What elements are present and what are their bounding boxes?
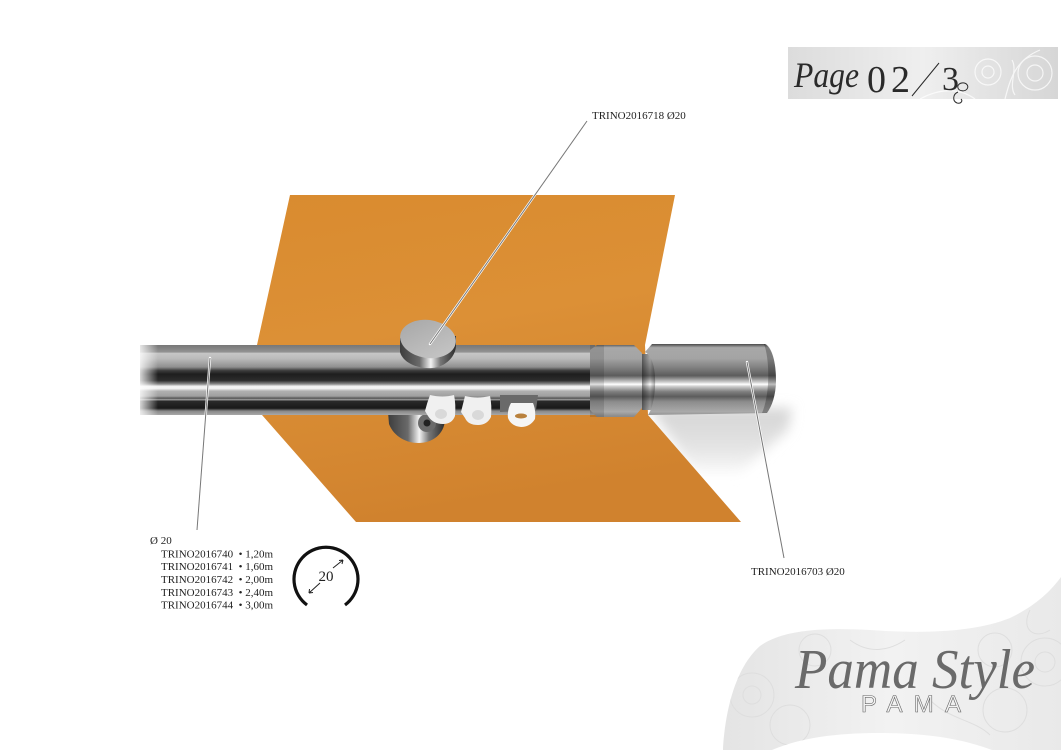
page number text: Page: [793, 55, 859, 95]
label: support part number: TRINO2016718 Ø20: [592, 110, 686, 122]
rod part list: TRINO2016741 • 1,60m: [161, 561, 273, 573]
rod tube: [140, 345, 595, 415]
collar: [590, 345, 642, 417]
diameter icon: 20: [318, 569, 334, 585]
page number banner: [788, 47, 1058, 103]
brand name: Pama Style: [794, 639, 1035, 701]
rod part list: Ø 20: [150, 535, 172, 547]
diameter icon: [294, 547, 358, 605]
left fade: [136, 343, 158, 418]
leader line: end cap: [747, 362, 784, 558]
page number text: 02: [867, 59, 910, 101]
page number text: [793, 55, 968, 103]
round support disc: [398, 316, 458, 368]
orange wall panel: [257, 195, 741, 522]
rod part list: TRINO2016743 • 2,40m: [161, 587, 273, 599]
rod part list: TRINO2016740 • 1,20m: [161, 548, 273, 560]
leader line: rod: [197, 358, 210, 530]
curtain rod illustration: [136, 316, 776, 443]
brand swoosh: [723, 577, 1061, 750]
rod part list: TRINO2016744 • 3,00m: [161, 600, 273, 612]
rod part list: [150, 535, 273, 612]
soft shadow below end cap: [650, 408, 792, 472]
brand subtitle: PAMA: [861, 691, 961, 718]
rod part list: TRINO2016742 • 2,00m: [161, 574, 273, 586]
label: end cap part number: TRINO2016703 Ø20: [751, 566, 845, 578]
neck between collar and end cap: [642, 354, 658, 410]
leader line: support: [430, 121, 587, 344]
end cap: [645, 344, 776, 415]
curtain clips: [425, 395, 538, 427]
wall bracket under rod: [388, 410, 445, 443]
page number text: 3: [942, 61, 959, 98]
